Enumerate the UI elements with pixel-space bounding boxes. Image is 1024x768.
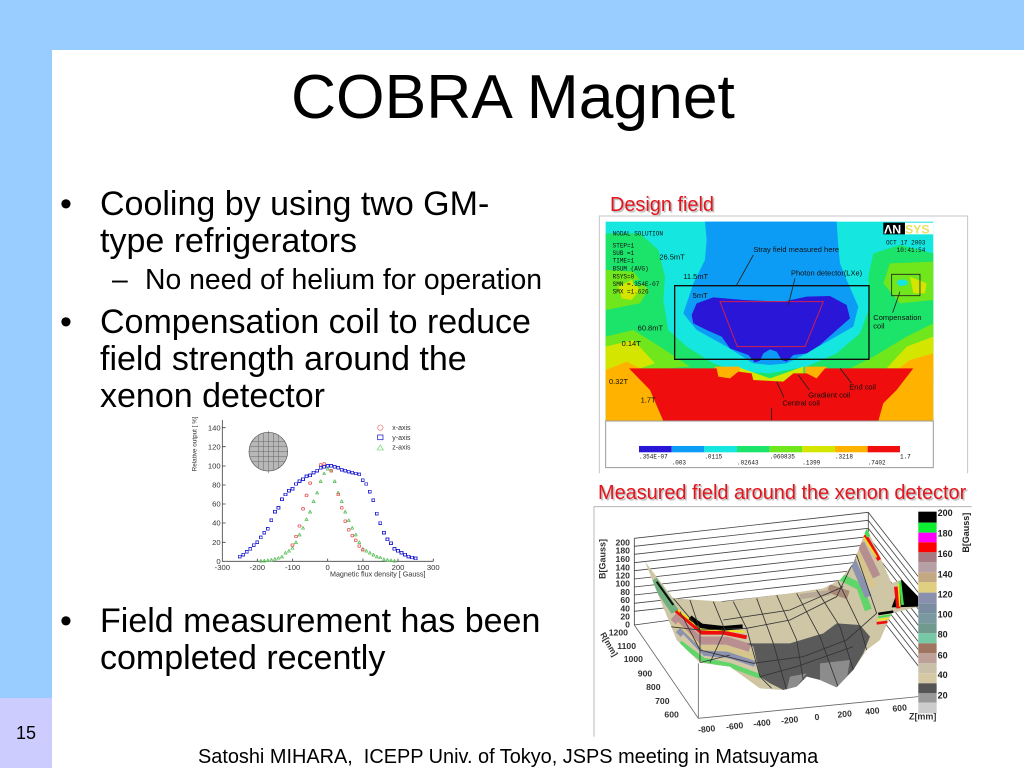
- colour scale values: .3218: [835, 453, 853, 460]
- colour scale values: .003: [672, 459, 686, 466]
- Z axis: -400: [753, 717, 771, 729]
- left colour bands: [685, 645, 762, 683]
- R axis title: R[mm]: [598, 630, 620, 658]
- R axis: 1100: [617, 641, 636, 651]
- B axis title: B[Gauss]: [597, 539, 607, 579]
- contour labels: 5mT: [693, 291, 708, 300]
- contour labels: 26.5mT: [659, 253, 685, 262]
- solver parameters: SUB =1: [613, 250, 635, 257]
- x axis ticks: -300: [215, 563, 230, 572]
- caption: measured field: Measured field around the xenon detector: [598, 482, 966, 504]
- left band: [0, 50, 52, 698]
- Z axis: -200: [781, 714, 799, 726]
- contour labels: Stray field measured here: [753, 245, 839, 254]
- colour scale values: .060835: [770, 453, 795, 460]
- colour scale values: .02643: [737, 459, 759, 466]
- contour labels: Photon detector(LXe): [791, 269, 863, 278]
- y axis ticks: 120: [208, 442, 221, 451]
- solver parameters: STEP=1: [613, 242, 635, 249]
- bullet: cooling: type refrigerators: [100, 222, 357, 260]
- bullet: compensation coil: xenon detector: [100, 377, 325, 415]
- y axis ticks: 60: [212, 500, 221, 509]
- contour labels: Gradient coil: [808, 391, 851, 400]
- x axis ticks: 300: [427, 563, 440, 572]
- y axis ticks: 40: [212, 519, 221, 528]
- contour labels: Compensation: [873, 313, 922, 322]
- Z axis: 0: [814, 712, 820, 722]
- R axis: [609, 627, 679, 719]
- R axis: 700: [655, 696, 670, 706]
- image frame: [599, 216, 968, 473]
- colour bar labels: [938, 508, 953, 700]
- bullet: compensation coil: field strength around the: [100, 340, 467, 378]
- top band: [0, 0, 1024, 50]
- solver parameters: TIME=1: [613, 258, 635, 265]
- B axis: [616, 537, 630, 630]
- contour labels: 1.7T: [641, 396, 656, 405]
- dark low-field region: [747, 623, 870, 690]
- text: –: [112, 264, 128, 296]
- data series: [240, 464, 416, 561]
- x axis ticks: -200: [250, 563, 265, 572]
- colour bar labels: 200: [938, 508, 953, 518]
- colour scale values: 1.7: [900, 453, 911, 460]
- title: COBRA Magnet: [291, 63, 735, 132]
- colour scale values: .0115: [704, 453, 723, 460]
- y axis ticks: 80: [212, 481, 221, 490]
- legend panel: [606, 421, 933, 468]
- colour scale values: .354E-07: [639, 453, 668, 460]
- surface: [645, 528, 918, 690]
- solver parameters: BSUM (AVG): [613, 266, 649, 273]
- colour scale values: .7402: [868, 459, 886, 466]
- Z axis: 600: [892, 702, 908, 714]
- R axis: 1000: [624, 654, 643, 664]
- colour bar labels: 40: [938, 670, 948, 680]
- x axis ticks: -100: [285, 563, 300, 572]
- y axis ticks: 20: [212, 538, 221, 547]
- ANSYS logo: ΛN: [884, 223, 901, 237]
- B axis: 60: [620, 595, 630, 605]
- colour bar labels: 160: [938, 549, 953, 559]
- y axis ticks: 100: [208, 462, 221, 471]
- legend: z-axis: [392, 445, 411, 452]
- Z axis title: Z[mm]: [909, 711, 936, 721]
- solver parameters: RSYS=0: [613, 273, 635, 280]
- contour labels: End coil: [849, 383, 876, 392]
- bullet: cooling: [60, 185, 489, 260]
- contour labels: 11.5mT: [683, 272, 709, 281]
- x axis ticks: 0: [326, 563, 330, 572]
- solver parameters: SMX =1.626: [613, 289, 649, 296]
- contour labels: 0.14T: [622, 339, 641, 348]
- frame: [594, 507, 972, 737]
- sub-bullet: helium: No need of helium for operation: [145, 264, 542, 296]
- contour labels: coil: [873, 322, 885, 331]
- slide number box: [0, 698, 52, 768]
- B axis: 80: [620, 587, 630, 597]
- back wall grid: [634, 512, 918, 718]
- ANSYS logo: [883, 223, 933, 237]
- ANSYS logo: SYS: [905, 223, 930, 237]
- colour bar: [918, 512, 937, 713]
- colour bar labels: 60: [938, 650, 948, 660]
- text: •: [60, 303, 72, 341]
- contour labels: Central coil: [782, 399, 820, 408]
- B axis: 0: [625, 620, 630, 630]
- slide number box: 15: [16, 723, 36, 743]
- x axis ticks: [215, 563, 440, 572]
- x axis ticks: 100: [357, 563, 369, 572]
- legend: [377, 425, 411, 452]
- axes: [222, 420, 433, 561]
- Z axis: -800: [698, 723, 716, 735]
- colour bar labels: 120: [938, 589, 953, 599]
- bullet: compensation coil: [60, 303, 531, 415]
- B axis: 180: [616, 546, 630, 556]
- solver parameters: [613, 230, 926, 296]
- x axis ticks: 200: [392, 563, 404, 572]
- x axis title: Magnetic flux density [ Gauss]: [330, 570, 425, 578]
- colour bar labels: 140: [938, 569, 953, 579]
- legend: x-axis: [392, 425, 411, 432]
- y axis ticks: 0: [216, 557, 221, 566]
- chart: measured field 3D surface: [594, 507, 972, 737]
- colour bar labels: 100: [938, 610, 953, 620]
- Z axis: -600: [726, 720, 744, 732]
- Z axis: 200: [837, 708, 853, 720]
- Z axis: 400: [865, 705, 880, 717]
- R axis: 900: [638, 669, 652, 679]
- mesh: [670, 555, 877, 690]
- y axis ticks: 140: [208, 423, 221, 432]
- B axis: 40: [620, 603, 630, 613]
- solver parameters: NODAL SOLUTION: [613, 230, 663, 237]
- R axis: 800: [646, 682, 661, 692]
- contour plot: [606, 222, 933, 468]
- colour bar labels: 20: [938, 690, 948, 700]
- y axis title: Relative output [ %]: [191, 416, 198, 471]
- bullet: field measurement: completed recently: [100, 639, 385, 677]
- colour scale values: [639, 453, 911, 466]
- R axis: 1200: [609, 627, 628, 637]
- caption: design field: Design field: [610, 194, 714, 216]
- Z axis: [698, 702, 908, 735]
- R axis: 600: [664, 709, 679, 719]
- colour bar labels: 80: [938, 630, 948, 640]
- B axis: 140: [616, 562, 630, 572]
- solver parameters: OCT 17 2003: [886, 239, 926, 246]
- B axis: 100: [616, 579, 630, 589]
- text: •: [60, 602, 72, 640]
- footer: Satoshi MIHARA, ICEPP Univ. of Tokyo, JSPS meeting in Matsuyama: [198, 746, 818, 768]
- contour labels: 0.32T: [609, 377, 629, 386]
- bullet: cooling: Cooling by using two GM-: [100, 185, 489, 223]
- B axis: 160: [616, 554, 630, 564]
- B axis: 200: [616, 537, 630, 547]
- colour scale values: .1399: [802, 459, 821, 466]
- solver parameters: SMN =.354E-07: [613, 281, 660, 288]
- chart: design field contour map: [599, 216, 968, 473]
- right lobe: [892, 579, 918, 607]
- text: •: [60, 185, 72, 223]
- bullet: field measurement: [60, 602, 540, 677]
- colour bar title: B[Gauss]: [961, 513, 971, 553]
- chart: sensor response scatter plot: [191, 416, 440, 578]
- B axis: 120: [616, 571, 630, 581]
- B axis: 20: [620, 612, 630, 622]
- icon: sensor grid disc: [249, 431, 288, 473]
- contour labels: 60.8mT: [638, 323, 663, 332]
- contour labels: [609, 245, 922, 408]
- right colour bands: [840, 577, 868, 610]
- colour scale: [639, 446, 900, 452]
- bullet: compensation coil: Compensation coil to reduce: [100, 303, 531, 341]
- solver parameters: 10:41:54: [897, 247, 926, 254]
- y axis ticks: [208, 423, 221, 566]
- legend: y-axis: [392, 435, 411, 442]
- colour bar labels: 180: [938, 529, 953, 539]
- bullet: field measurement: Field measurement has been: [100, 602, 540, 640]
